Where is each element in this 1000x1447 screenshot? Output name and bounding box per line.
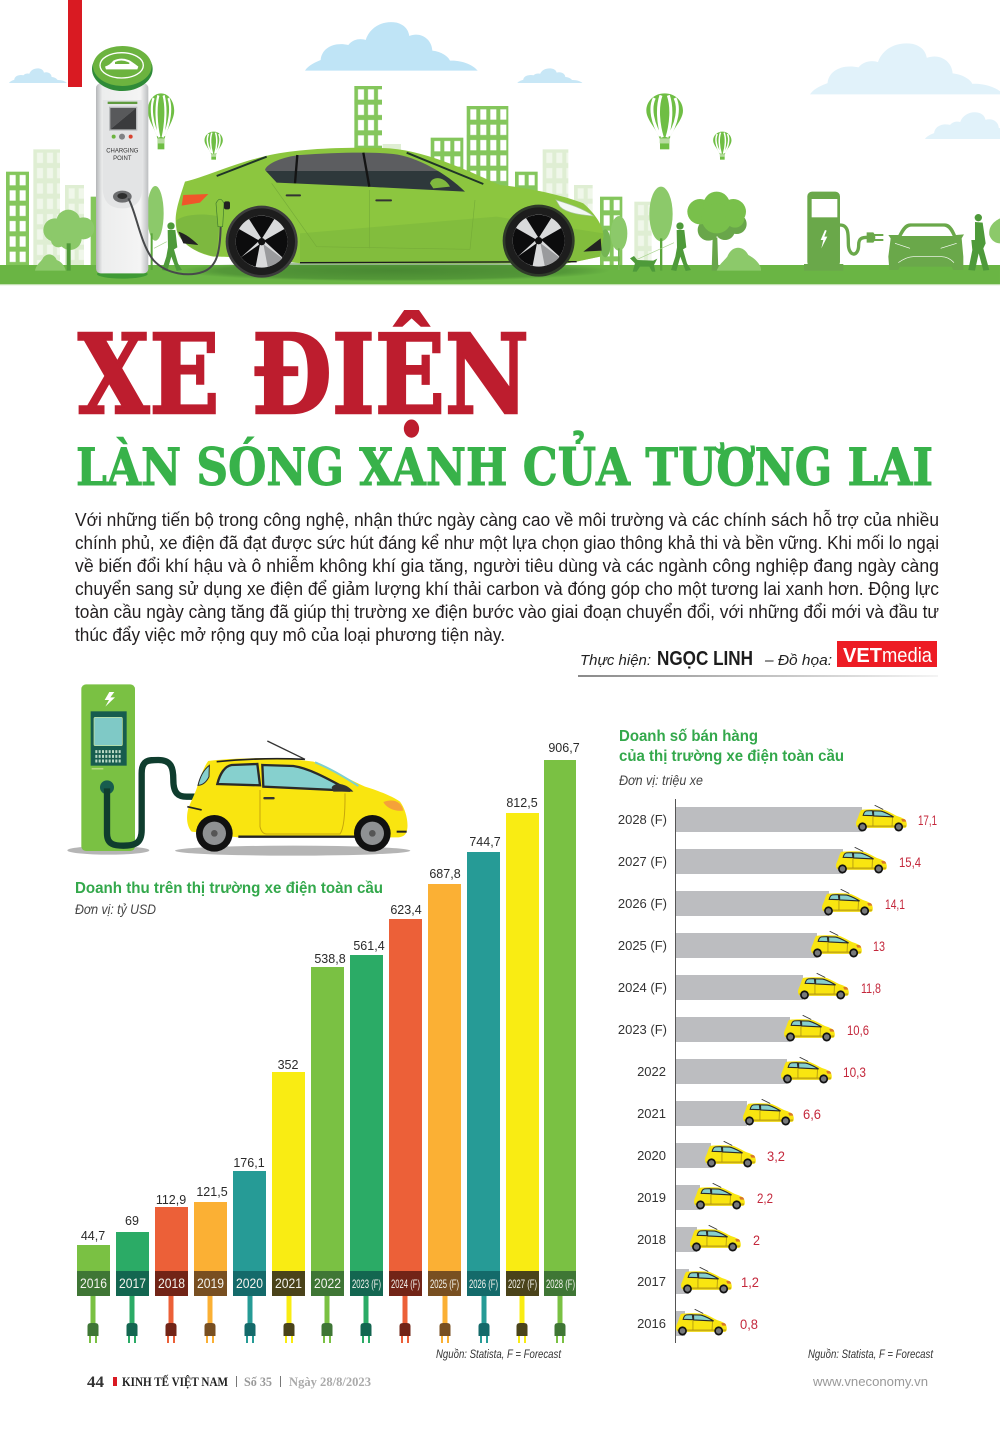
trees and bushes [35, 186, 1000, 271]
year labels: 2023 (F) [352, 1277, 381, 1291]
cords and prongs [90, 1296, 563, 1343]
bar value labels: 687,8 [429, 867, 461, 881]
footer: website: www.vneconomy.vn [812, 1374, 928, 1389]
year labels: 2028 (F) [618, 812, 667, 827]
bar value labels: 112,9 [156, 1193, 186, 1207]
city buildings [6, 86, 652, 270]
value labels: 11,8 [861, 981, 881, 996]
axis [675, 799, 676, 1343]
bar value labels: 812,5 [506, 796, 538, 810]
byline and graphics credit: – Đồ họa: [764, 652, 832, 669]
intro paragraph: chuyển sang sử dụng xe điện để giảm lượng khí thải carbon và đóng góp cho một tương lai xanh hơn. Động lực [75, 579, 939, 599]
bar value labels [81, 741, 580, 1243]
byline and graphics credit: media [882, 645, 933, 667]
year labels: 2026 (F) [469, 1277, 498, 1291]
small yellow cars [676, 805, 907, 1335]
value labels: 2,2 [757, 1191, 773, 1206]
bar chart: global EV unit sales [618, 799, 937, 1343]
byline and graphics credit: NGỌC LINH [657, 648, 753, 670]
year labels: 2026 (F) [618, 896, 667, 911]
year labels: 2027 (F) [508, 1277, 537, 1291]
byline and graphics credit: Thực hiện: [580, 652, 651, 669]
bar value labels: 623,4 [390, 903, 422, 917]
value labels: 0,8 [740, 1317, 758, 1332]
year labels: 2020 [637, 1148, 666, 1163]
charging pump [81, 684, 135, 851]
value labels: 14,1 [885, 897, 905, 912]
cloud: lower right [925, 112, 1000, 139]
heading: sales chart: của thị trường xe điện toàn cầu [619, 748, 844, 765]
year labels: 2024 (F) [618, 980, 667, 995]
value labels: 13 [873, 939, 885, 954]
value labels: 10,6 [847, 1023, 869, 1038]
charging point kiosk [92, 46, 153, 279]
cloud: small centre [517, 68, 582, 83]
intro paragraph: toàn cầu ngày càng tăng đã giúp thị trường xe điện bước vào giai đoạn chuyển đổi, với những đổi mới và đầu tư [75, 602, 939, 622]
year labels: 2019 [197, 1276, 224, 1291]
title: XE ĐIỆN [78, 310, 529, 439]
value labels: 1,2 [741, 1275, 759, 1290]
year labels: 2021 [637, 1106, 666, 1121]
intro paragraph [75, 509, 939, 645]
bar value labels: 121,5 [196, 1185, 228, 1199]
grey bars [676, 807, 862, 1336]
year labels [618, 812, 667, 1331]
charging station silhouette [804, 192, 883, 271]
year labels: 2016 [637, 1316, 666, 1331]
red top bookmark [68, 0, 82, 87]
plugs under bars [88, 1323, 566, 1336]
yellow car [187, 741, 408, 852]
heading: sales chart: Doanh số bán hàng [619, 728, 758, 745]
year labels: 2017 [637, 1274, 666, 1289]
year labels: 2017 [119, 1276, 146, 1291]
unit: sales chart: Đơn vị: triệu xe [619, 772, 703, 788]
cloud: large centre [305, 22, 478, 71]
hot air balloons [148, 93, 731, 160]
year labels: 2022 [637, 1064, 666, 1079]
bar chart: global EV market revenue [77, 741, 580, 1343]
year labels: 2027 (F) [618, 854, 667, 869]
byline and graphics credit: VET [843, 645, 882, 667]
footer: page number and publication: Số 35 [244, 1375, 272, 1389]
source: revenue chart: Nguồn: Statista, F = Forecast [436, 1349, 562, 1361]
unit: revenue chart: Đơn vị: tỷ USD [75, 901, 156, 917]
source: sales chart: Nguồn: Statista, F = Forecast [808, 1349, 934, 1361]
cloud: large right [810, 43, 1000, 94]
charging cable [107, 760, 215, 846]
year bands [77, 1271, 576, 1296]
illustration: yellow car charging at green pump [67, 684, 410, 856]
footer: page number and publication: 44 [87, 1374, 104, 1391]
byline and graphics credit [578, 641, 938, 677]
year labels: 2018 [158, 1276, 185, 1291]
footer: page number and publication: KINH TẾ VIỆT NAM [122, 1374, 228, 1389]
kiosk label: POINT [113, 156, 132, 162]
intro paragraph: Với những tiến bộ trong công nghệ, nhận thức ngày càng cao về môi trường và các chính sách hỗ trợ của nhiều [75, 509, 939, 530]
year labels [80, 1276, 575, 1291]
charging cable and connector [128, 198, 230, 274]
year labels: 2025 (F) [618, 938, 667, 953]
intro paragraph: về biến đổi khí hậu và ô nhiễm không khí gia tăng, người tiêu dùng và các ngành công nghiệp đang ngày càng [75, 555, 939, 576]
value labels: 10,3 [843, 1065, 866, 1080]
intro paragraph: chính phủ, xe điện đã đạt được sức hút đáng kể như một lựa chọn giao thông khả thi và bền vững. Khi mối lo ngại [75, 533, 939, 553]
bars [77, 760, 576, 1271]
car silhouette [888, 223, 964, 270]
heading: sales chart [619, 728, 844, 765]
year labels: 2023 (F) [618, 1022, 667, 1037]
value labels: 17,1 [918, 813, 937, 828]
bar value labels: 44,7 [81, 1229, 105, 1243]
footer: page number and publication: Ngày 28/8/2023 [289, 1375, 371, 1389]
year labels: 2018 [637, 1232, 666, 1247]
year labels: 2021 [275, 1276, 302, 1291]
bar value labels: 176,1 [233, 1156, 265, 1170]
heading: revenue chart: Doanh thu trên thị trường xe điện toàn cầu [75, 880, 383, 897]
ground strip [0, 265, 1000, 285]
walker silhouette [968, 214, 989, 271]
value labels: 6,6 [803, 1107, 821, 1122]
hero illustration: green city with charging car [0, 22, 1000, 285]
year labels: 2016 [80, 1276, 107, 1291]
cloud: small left [9, 68, 67, 83]
main green electric car [176, 148, 610, 281]
footer: page number and publication [87, 1374, 371, 1391]
year labels: 2025 (F) [430, 1277, 459, 1291]
year labels: 2028 (F) [546, 1277, 575, 1291]
value labels: 15,4 [899, 855, 921, 870]
year labels: 2024 (F) [391, 1277, 420, 1291]
bar value labels: 906,7 [548, 741, 580, 755]
bar value labels: 69 [125, 1214, 139, 1228]
bar value labels: 561,4 [353, 939, 385, 953]
walkers and dog [154, 222, 691, 272]
year labels: 2020 [236, 1276, 263, 1291]
year labels: 2022 [314, 1276, 341, 1291]
year labels: 2019 [637, 1190, 666, 1205]
intro paragraph: thúc đẩy việc mở rộng quy mô của loại phương tiện này. [75, 625, 505, 645]
kiosk label: CHARGING [106, 149, 139, 155]
bar value labels: 352 [278, 1058, 298, 1072]
bar value labels: 744,7 [469, 835, 501, 849]
value labels: 2 [753, 1233, 760, 1248]
value labels [740, 813, 937, 1332]
bar value labels: 538,8 [314, 952, 346, 966]
value labels: 3,2 [767, 1149, 785, 1164]
